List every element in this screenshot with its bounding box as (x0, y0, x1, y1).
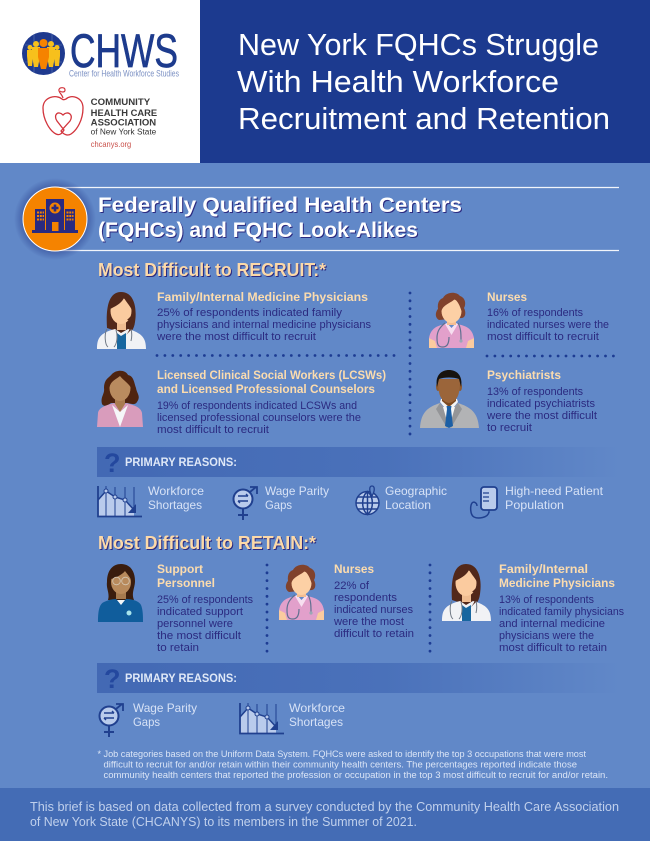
reason: wage parity gaps (retain) (100, 701, 197, 737)
logo: CHCANYS: COMMUNITY (91, 97, 150, 107)
heading: most difficult to recruit: Most Difficult to RECRUIT:* (98, 260, 326, 280)
reason: geographic location: Location (385, 498, 431, 512)
text: family physicians (retain): 13% of respondents (499, 594, 594, 606)
footnote (98, 749, 608, 780)
reason: wage parity gaps: Gaps (265, 498, 292, 512)
reason: high-need patient population (471, 484, 604, 518)
text: LCSWs (157, 368, 386, 436)
text: family/internal medicine physicians: 25% of respondents indicated family (157, 307, 343, 319)
icon: hospital badge (14, 178, 96, 260)
logo: CHCANYS: chcanys.org (91, 139, 131, 149)
text: family physicians (retain): most difficult to retain (499, 642, 607, 654)
section heading banner (60, 188, 619, 250)
reason: wage parity gaps (retain): Gaps (133, 715, 160, 729)
text: family/internal medicine physicians (156, 290, 371, 343)
text: support personnel: to retain (157, 642, 199, 654)
text: family physicians (retain): Medicine Physicians (499, 576, 615, 590)
band: primary reasons (retain) (97, 663, 620, 694)
band: primary reasons (retain): ? (104, 664, 120, 694)
section heading banner: Federally Qualified Health Centers (98, 193, 462, 217)
header: title panel: Recruitment and Retention (238, 101, 610, 136)
header: title panel: New York FQHCs Struggle (238, 27, 599, 62)
figure: social worker (97, 371, 143, 427)
dotted dividers: recruit (157, 293, 619, 434)
figure: family physician (97, 292, 146, 349)
logo: CHCANYS: of New York State (91, 128, 157, 136)
text: support personnel: personnel were (157, 618, 233, 630)
reason: workforce shortages (retain): Workforce (289, 701, 345, 715)
reason: geographic location (356, 484, 447, 514)
reason: wage parity gaps: Wage Parity (265, 484, 329, 498)
footnote: Job categories based on the Uniform Data System. FQHCs were asked to identify the top 3 occupations that were most (104, 749, 587, 759)
reason: workforce shortages: Shortages (148, 498, 202, 512)
text: support personnel: the most difficult (157, 630, 241, 642)
logo: CHWS: CHWS (70, 24, 178, 77)
footnote: * (98, 749, 102, 759)
text: nurses (retain) (333, 562, 414, 640)
text: psychiatrists: Psychiatrists (487, 368, 561, 382)
text: family physicians (retain) (499, 562, 624, 654)
footnote: community health centers that reported the profession or occupation in the top 3 most difficult to recruit for and/or retain. (104, 770, 608, 780)
text: LCSWs: and Licensed Professional Counselors (157, 382, 375, 396)
band: primary reasons (retain): PRIMARY REASONS: (125, 673, 237, 685)
text: psychiatrists (486, 368, 597, 434)
text: support personnel: indicated support (157, 606, 243, 618)
figure: nurse (retain) (279, 565, 324, 620)
text: psychiatrists: to recruit (487, 422, 532, 434)
text: nurses (retain): indicated nurses (334, 604, 413, 616)
text: nurses (retain): respondents (334, 592, 398, 604)
band: primary reasons (recruit): PRIMARY REASONS: (125, 457, 237, 469)
reason: wage parity gaps (234, 484, 329, 520)
text: nurses (retain): Nurses (334, 562, 374, 576)
text: nurses: most difficult to recruit (487, 331, 599, 343)
text: family/internal medicine physicians: were the most difficult to recruit (156, 331, 316, 343)
text: support personnel: 25% of respondents (157, 594, 253, 606)
reason: workforce shortages (retain) (240, 701, 345, 734)
text: nurses: Nurses (487, 290, 527, 304)
footer: of New York State (CHCANYS) to its members in the Summer of 2021. (30, 814, 417, 829)
text: nurses (retain): were the most (333, 616, 404, 628)
text: support personnel: Support (157, 562, 203, 576)
dotted dividers: retain (267, 565, 430, 652)
text: family/internal medicine physicians: Family/Internal Medicine Physicians (157, 290, 368, 304)
logo: CHWS (22, 24, 179, 80)
footer: This brief is based on data collected from a survey conducted by the Community Health Care Association (30, 799, 619, 814)
text: LCSWs: 19% of respondents indicated LCSWs and (157, 400, 357, 412)
band: primary reasons (recruit): ? (104, 448, 120, 478)
text: family physicians (retain): physicians were the (499, 630, 594, 642)
text: nurses (487, 290, 609, 343)
text: psychiatrists: 13% of respondents (487, 386, 583, 398)
reason: high-need patient population: High-need Patient (505, 484, 604, 498)
section heading banner: (FQHCs) and FQHC Look-Alikes (98, 218, 418, 242)
text: nurses (retain): 22% of (334, 580, 370, 592)
reason: workforce shortages: Workforce (148, 484, 204, 498)
header: title panel (200, 0, 650, 163)
text: family physicians (retain): and internal medicine (499, 618, 605, 630)
reason: workforce shortages (98, 484, 204, 516)
figure: family physician (retain) (442, 564, 491, 621)
text: family physicians (retain): Family/Internal (499, 562, 588, 576)
heading: most difficult to retain: Most Difficult to RETAIN:* (98, 533, 316, 553)
text: nurses: indicated nurses were the (487, 319, 609, 331)
footnote: difficult to recruit for and/or retain within their community health centers. The percentages reported indicate those (104, 760, 577, 770)
reason: workforce shortages (retain): Shortages (289, 715, 343, 729)
header: logos panel (0, 0, 200, 163)
text: LCSWs: Licensed Clinical Social Workers (LCSWs) (157, 368, 386, 382)
text: psychiatrists: were the most difficult (486, 410, 597, 422)
text: nurses: 16% of respondents (487, 307, 583, 319)
logo: CHWS: Center for Health Workforce Studies (69, 68, 179, 80)
text: psychiatrists: indicated psychiatrists (487, 398, 595, 410)
band: primary reasons (recruit) (97, 447, 620, 478)
text: LCSWs: licensed professional counselors were the (157, 412, 361, 424)
text: LCSWs: most difficult to recruit (157, 424, 269, 436)
text: family physicians (retain): indicated family physicians (499, 606, 624, 618)
logo: CHCANYS: ASSOCIATION (91, 118, 156, 128)
reason: wage parity gaps (retain): Wage Parity (133, 701, 197, 715)
text: family/internal medicine physicians: physicians and internal medicine physicians (157, 319, 371, 331)
text: nurses (retain): difficult to retain (334, 628, 414, 640)
logo: CHCANYS: HEALTH CARE (91, 108, 157, 118)
reason: geographic location: Geographic (385, 484, 447, 498)
reason: high-need patient population: Population (505, 498, 564, 512)
figure: psychiatrist (420, 370, 479, 428)
figure: support personnel (98, 564, 143, 622)
figure: nurse (429, 293, 474, 348)
text: support personnel (157, 562, 253, 654)
text: support personnel: Personnel (157, 576, 215, 590)
logo: CHCANYS (43, 88, 157, 149)
header: title panel: With Health Workforce (237, 64, 559, 99)
footer (0, 788, 650, 841)
